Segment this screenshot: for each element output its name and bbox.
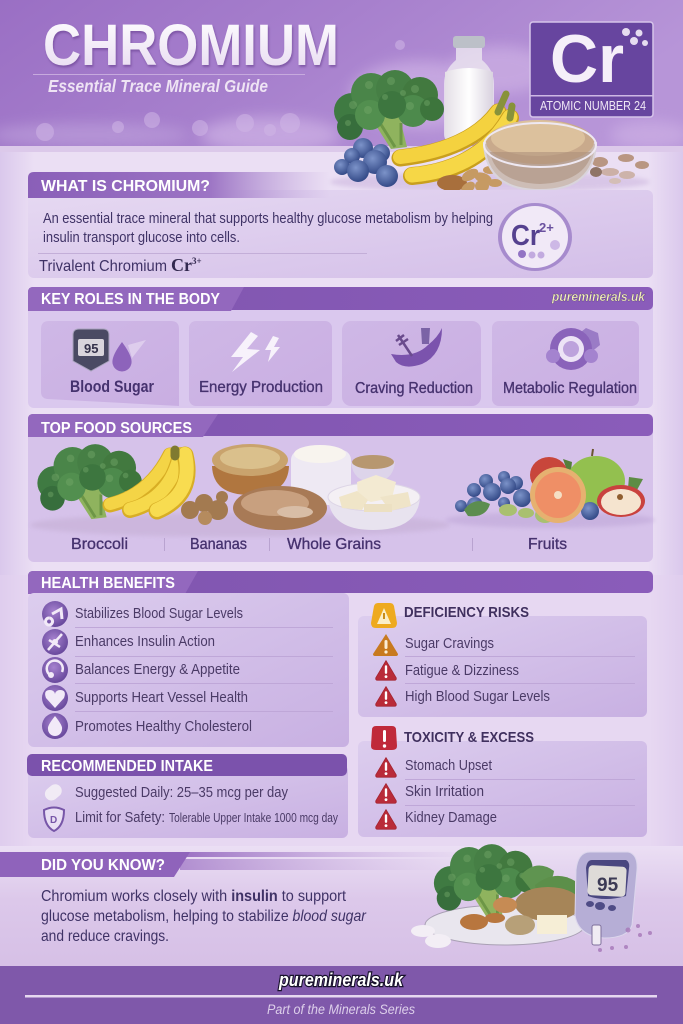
broccoli bbox=[334, 70, 444, 149]
risk: stomach upset bbox=[376, 757, 493, 777]
risk: skin irritation bbox=[376, 783, 484, 803]
limit for safety bbox=[75, 809, 339, 826]
subtitle: Essential Trace Mineral Guide bbox=[48, 76, 268, 96]
card: blood sugar bbox=[41, 321, 179, 406]
food: tofu bowl bbox=[328, 475, 420, 530]
icon: lightning bolts bbox=[231, 332, 280, 372]
icon: pill bbox=[42, 782, 64, 803]
card: metabolic regulation: Metabolic Regulation bbox=[503, 380, 637, 397]
icon: glucose meter and drop: 95 bbox=[84, 341, 98, 356]
icon: bowl and fork bbox=[391, 328, 442, 367]
heading: top food sources bbox=[28, 414, 653, 437]
footer bbox=[0, 966, 683, 1024]
food labels: Broccoli bbox=[71, 536, 128, 553]
food labels: Fruits bbox=[528, 536, 567, 553]
heading: recommended intake bbox=[27, 754, 347, 776]
heading: health benefits bbox=[28, 571, 653, 594]
Cr3+ formula: 3+ bbox=[192, 256, 202, 266]
description bbox=[43, 210, 493, 246]
heading: did you know bbox=[0, 852, 470, 877]
heading: recommended intake: RECOMMENDED INTAKE bbox=[41, 758, 213, 775]
card: metabolic regulation bbox=[492, 321, 639, 406]
panel: recommended intake bbox=[27, 754, 348, 838]
food labels bbox=[71, 536, 567, 553]
panel: health benefits list bbox=[28, 593, 349, 747]
panel: deficiency risks bbox=[358, 603, 647, 717]
risk: fatigue bbox=[376, 661, 519, 680]
card: energy production bbox=[189, 321, 332, 406]
fact text: glucose metabolism, helping to stabilize blood sugar bbox=[41, 908, 367, 925]
bananas bbox=[400, 94, 512, 176]
food: walnuts bbox=[181, 491, 228, 525]
food: broccoli bbox=[37, 444, 142, 519]
benefit: blood sugar: Stabilizes Blood Sugar Levels bbox=[75, 605, 243, 622]
nuts bbox=[437, 166, 502, 197]
element tile: Cr bbox=[530, 21, 653, 117]
heading: key roles bbox=[28, 287, 653, 311]
risk: stomach upset: Stomach Upset bbox=[405, 757, 493, 774]
heading: did you know: DID YOU KNOW? bbox=[41, 857, 165, 874]
risk: high blood sugar: High Blood Sugar Levels bbox=[405, 688, 550, 705]
heading: top food sources: TOP FOOD SOURCES bbox=[41, 420, 192, 437]
limit for safety: Tolerable Upper Intake 1000 mcg day bbox=[169, 811, 339, 825]
icon: glucose meter bbox=[575, 852, 637, 945]
grain bowl bbox=[484, 120, 596, 190]
food: bananas bbox=[110, 450, 187, 511]
fact text bbox=[41, 888, 367, 945]
risk: fatigue: Fatigue & Dizziness bbox=[405, 662, 519, 679]
footer site name: pureminerals.uk bbox=[278, 970, 404, 990]
food: yogurt jar bbox=[291, 445, 351, 505]
milk bottle bbox=[444, 36, 494, 142]
panel: top food sources bbox=[28, 414, 655, 562]
card: craving reduction bbox=[342, 321, 481, 406]
purple droplets bbox=[598, 924, 652, 952]
blueberries bbox=[334, 138, 398, 187]
food: fruits bbox=[455, 449, 645, 523]
icon: glucose meter: 95 bbox=[597, 875, 619, 896]
panel: did you know bbox=[0, 844, 683, 966]
icon: red warning bbox=[371, 726, 397, 750]
title: CHROMIUM bbox=[43, 13, 339, 78]
icon: gear and cells bbox=[546, 328, 600, 370]
food: small bowl bbox=[351, 455, 395, 482]
atomic number: ATOMIC NUMBER 24 bbox=[540, 98, 646, 113]
risk: sugar cravings: Sugar Cravings bbox=[405, 635, 494, 652]
description: insulin transport glucose into cells. bbox=[43, 229, 240, 246]
icon: shield: D bbox=[50, 815, 57, 826]
icon: yellow warning bbox=[371, 603, 397, 628]
trivalent chromium: Trivalent Chromium bbox=[39, 258, 167, 275]
plate of food bbox=[425, 844, 585, 945]
risk: kidney damage bbox=[376, 809, 497, 829]
benefit: energy bbox=[42, 657, 240, 683]
risk: high blood sugar bbox=[376, 687, 550, 706]
card: craving reduction: Craving Reduction bbox=[355, 380, 473, 397]
heading: deficiency risks: DEFICIENCY RISKS bbox=[404, 604, 529, 621]
heading: what is chromium bbox=[28, 172, 330, 198]
fact text: Chromium works closely with insulin to support bbox=[41, 888, 346, 905]
header food illustration bbox=[330, 36, 650, 197]
element symbol: Cr bbox=[550, 21, 624, 97]
risk: skin irritation: Skin Irritation bbox=[405, 783, 484, 800]
panel: key roles bbox=[28, 287, 653, 408]
icon: shield bbox=[44, 808, 64, 831]
heading: health benefits: HEALTH BENEFITS bbox=[41, 575, 175, 592]
heading: key roles: KEY ROLES IN THE BODY bbox=[41, 291, 220, 308]
Cr3+ formula: Cr bbox=[171, 255, 192, 275]
pills bbox=[411, 925, 451, 948]
card: blood sugar: Blood Sugar bbox=[70, 378, 154, 396]
food labels: Whole Grains bbox=[287, 536, 381, 553]
fact text: and reduce cravings. bbox=[41, 928, 169, 945]
suggested daily: Suggested Daily: 25–35 mcg per day bbox=[75, 784, 288, 801]
icon: Cr2+ ion: Cr bbox=[511, 220, 540, 252]
icon: Cr2+ ion: 2+ bbox=[539, 220, 554, 235]
electron dots bbox=[622, 28, 648, 46]
benefit: heart: Supports Heart Vessel Health bbox=[75, 689, 248, 706]
food: bread bbox=[233, 486, 327, 530]
grain bowl right seeds bbox=[590, 154, 649, 184]
benefit: energy: Balances Energy & Appetite bbox=[75, 661, 240, 678]
card: energy production: Energy Production bbox=[199, 379, 323, 396]
description: An essential trace mineral that supports healthy glucose metabolism by helping bbox=[43, 210, 493, 227]
risk: sugar cravings bbox=[373, 634, 494, 656]
header banner bbox=[0, 0, 683, 153]
heading: what is chromium: WHAT IS CHROMIUM? bbox=[41, 178, 210, 195]
panel: what is chromium bbox=[28, 172, 653, 278]
heading: toxicity: TOXICITY & EXCESS bbox=[404, 729, 534, 746]
limit for safety: Limit for Safety: bbox=[75, 809, 165, 826]
icon: Cr2+ ion bbox=[498, 203, 572, 271]
footer series note: Part of the Minerals Series bbox=[267, 1002, 415, 1017]
benefit: heart bbox=[42, 685, 248, 711]
benefit: blood sugar bbox=[42, 601, 243, 627]
risk: kidney damage: Kidney Damage bbox=[405, 809, 497, 826]
benefit: cholesterol bbox=[42, 713, 252, 739]
benefit: insulin: Enhances Insulin Action bbox=[75, 633, 215, 650]
panel: toxicity and excess bbox=[358, 726, 647, 837]
benefit: insulin bbox=[42, 629, 215, 655]
food labels: Bananas bbox=[190, 536, 247, 553]
food: grain bowl bbox=[212, 444, 289, 495]
site tag: pureminerals.uk bbox=[551, 289, 646, 304]
benefit: cholesterol: Promotes Healthy Cholesterol bbox=[75, 718, 252, 735]
